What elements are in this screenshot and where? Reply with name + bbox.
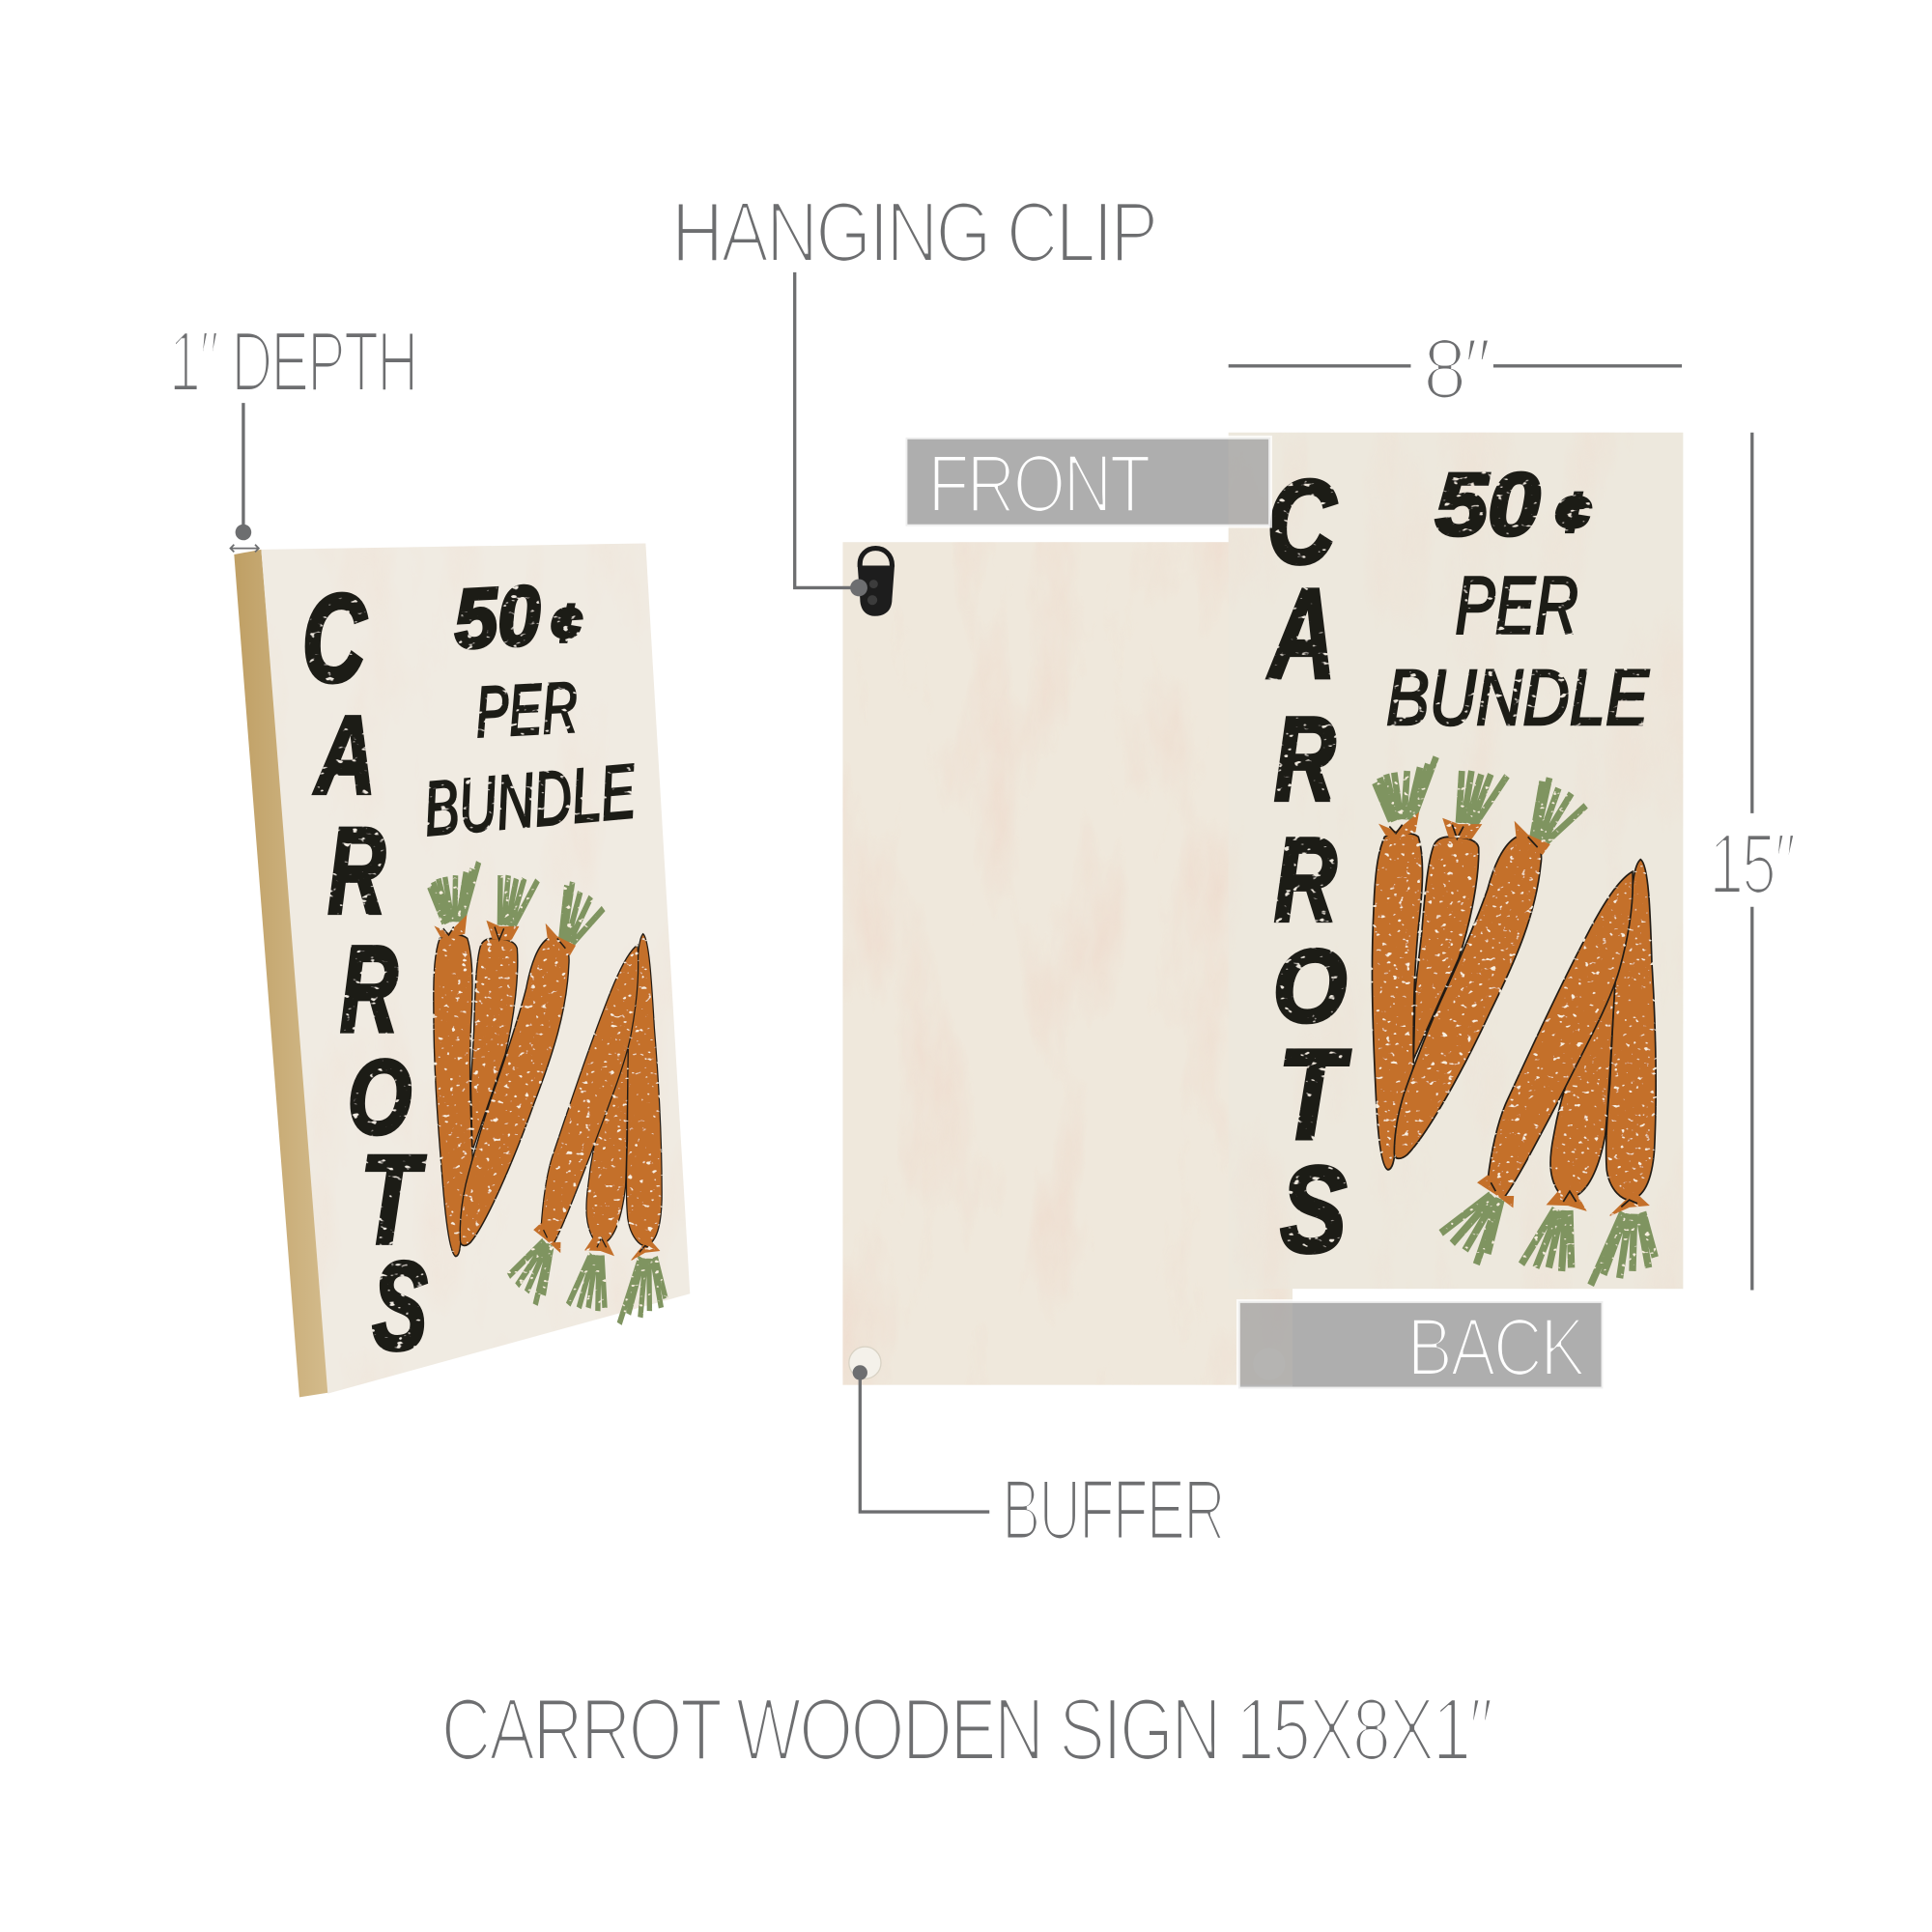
front price text	[1386, 456, 1650, 742]
front carrots	[1372, 757, 1656, 1285]
label: BACK tag: BACK	[1407, 1301, 1586, 1392]
front price text: BUNDLE	[1386, 654, 1650, 742]
front word: CARROTS: C	[1266, 456, 1337, 589]
angled word: CARROTS: T	[359, 1128, 426, 1270]
callout: buffer	[853, 1365, 1224, 1557]
angled word: CARROTS: R	[327, 803, 385, 940]
callout: depth: 1″ DEPTH	[169, 313, 416, 409]
callout: hanging clip: HANGING CLIP	[671, 184, 1155, 279]
angled price text: ¢	[551, 595, 582, 652]
front word: CARROTS: T	[1278, 1024, 1351, 1167]
panel: angled sign	[234, 543, 690, 1397]
front word: CARROTS: O	[1273, 927, 1347, 1043]
angled word: CARROTS: A	[313, 694, 376, 817]
dimension: height 15 in: 15″	[1709, 816, 1796, 912]
label: BACK tag	[1238, 1301, 1603, 1392]
angled word: CARROTS: R	[340, 922, 398, 1059]
front price text: 50	[1435, 456, 1540, 554]
icon: hanging clip	[858, 549, 895, 616]
callout: buffer: BUFFER	[1002, 1462, 1224, 1557]
angled price text: BUNDLE	[420, 748, 639, 852]
angled price text: 50	[452, 568, 543, 667]
label: FRONT tag: FRONT	[927, 438, 1150, 528]
front word: CARROTS: R	[1274, 813, 1337, 947]
front price text: ¢	[1555, 482, 1591, 543]
front price text: PER	[1455, 560, 1578, 651]
panel: back of sign	[842, 542, 1293, 1385]
callout: hanging clip	[671, 184, 1155, 596]
panel: front of sign	[1229, 433, 1683, 1289]
title: CARROT WOODEN SIGN 15X8X1″	[441, 1681, 1492, 1778]
angled word: CARROTS	[301, 567, 428, 1377]
front word: CARROTS	[1266, 456, 1351, 1279]
icon: buffer	[849, 1347, 881, 1378]
angled word: CARROTS: C	[301, 567, 367, 708]
angled price text	[420, 568, 639, 852]
angled carrots	[426, 862, 667, 1323]
angled price text: PER	[473, 667, 580, 753]
sign face	[261, 543, 690, 1394]
front word: CARROTS: A	[1267, 563, 1336, 706]
callout: depth	[169, 313, 416, 552]
front word: CARROTS: S	[1280, 1142, 1347, 1279]
sign edge	[234, 550, 330, 1397]
angled word: CARROTS: S	[372, 1236, 428, 1377]
angled word: CARROTS: O	[348, 1038, 412, 1156]
front word: CARROTS: R	[1274, 693, 1336, 826]
dimension: width 8 in: 8″	[1423, 321, 1491, 416]
icon: second buffer	[1253, 1348, 1285, 1380]
